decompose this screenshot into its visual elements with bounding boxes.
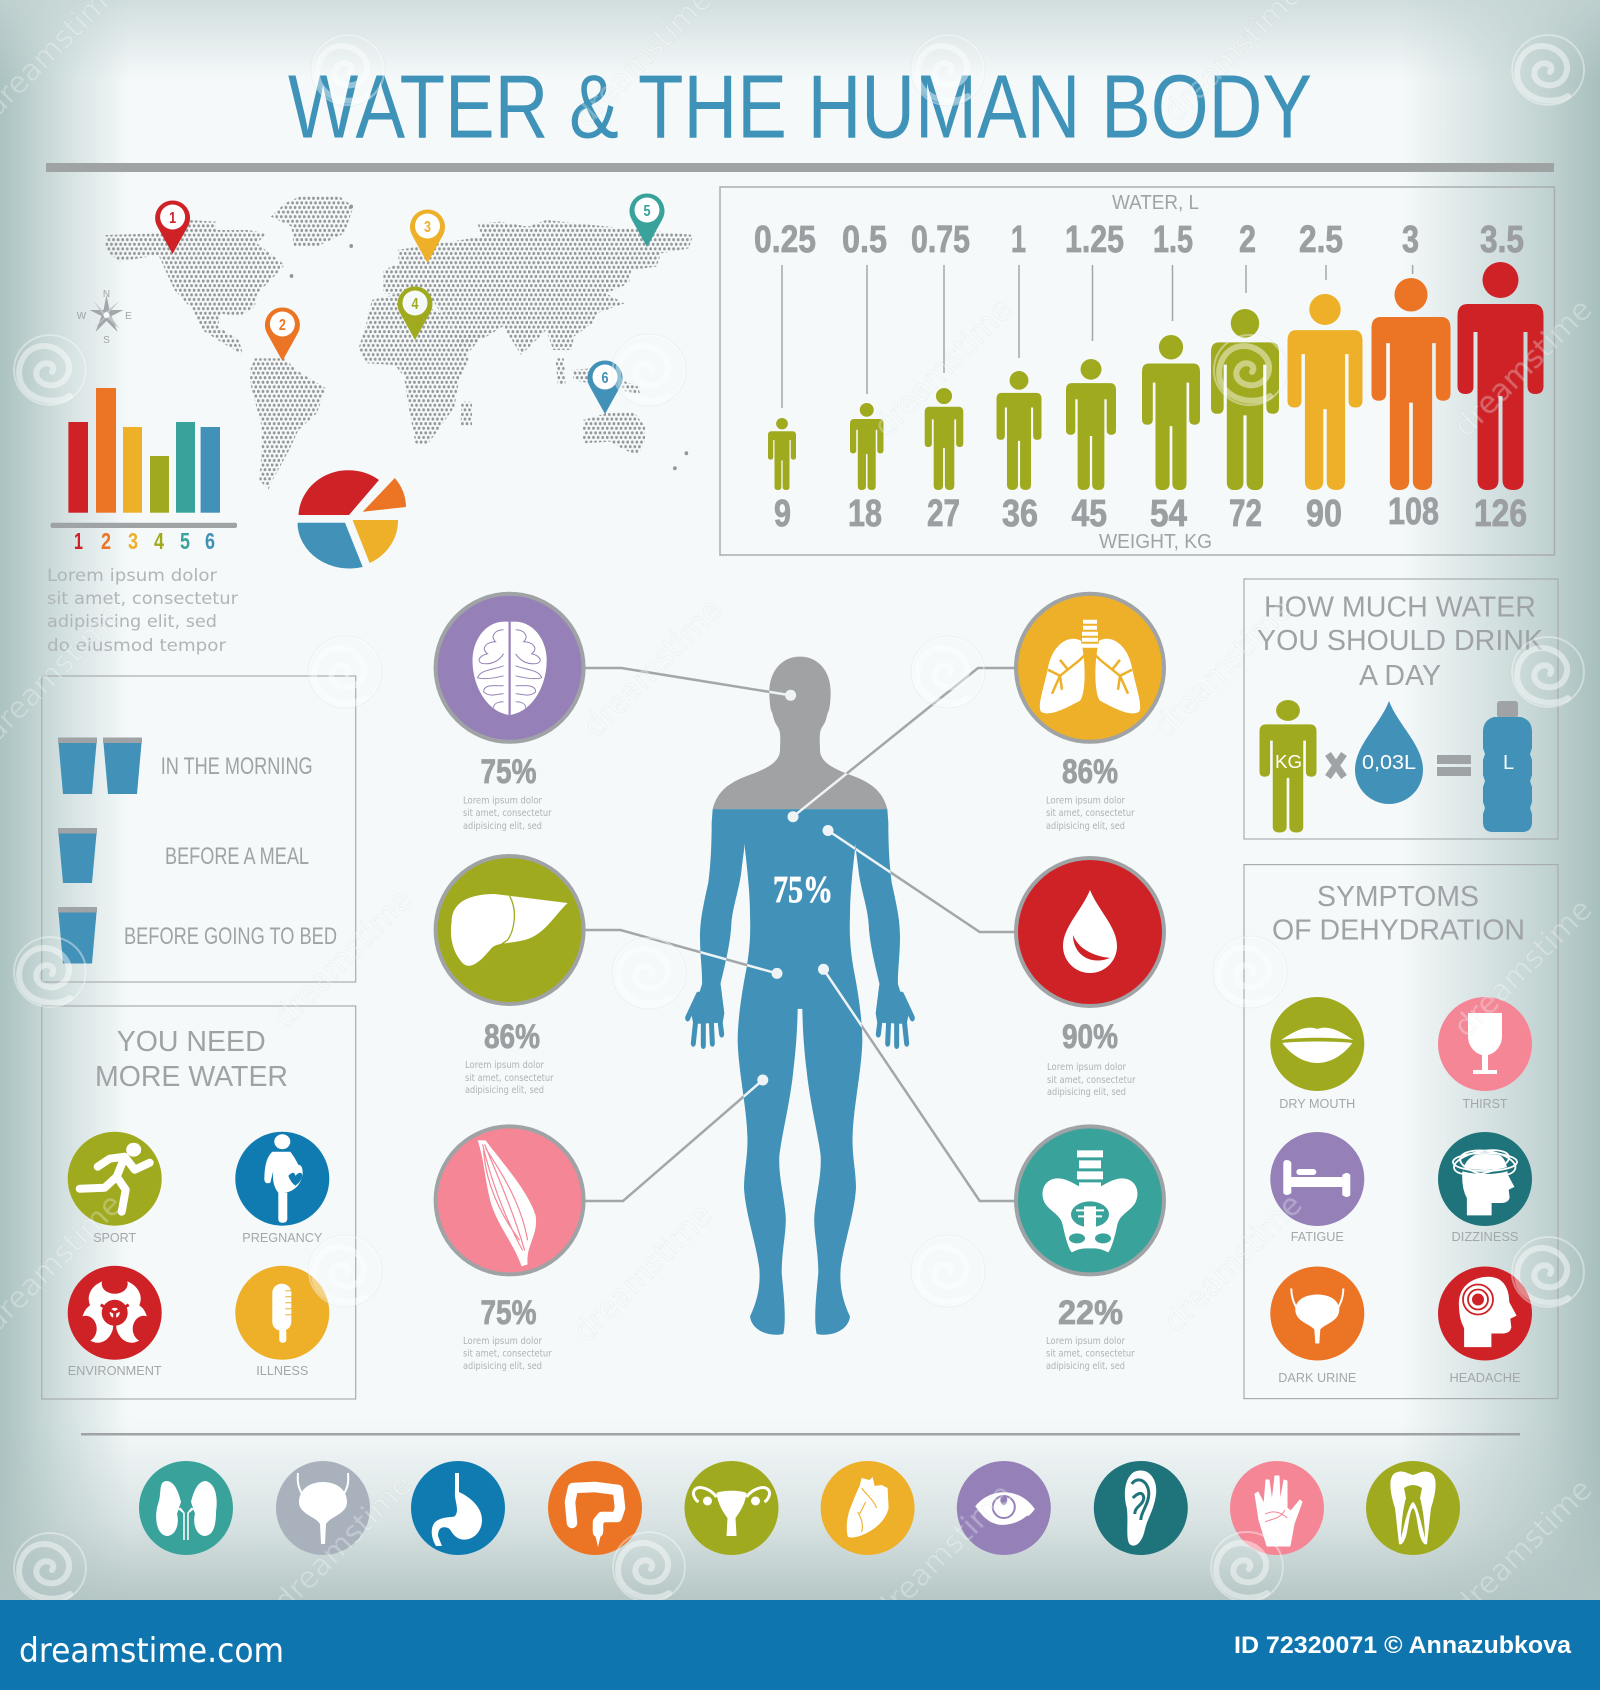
watermark text: dreamstime xyxy=(1157,1187,1309,1339)
panel: water by weight xyxy=(720,187,1554,555)
intro text block: sit amet, consectetur xyxy=(47,589,238,609)
stat: lungs xyxy=(1046,753,1135,832)
white connector segments inside body xyxy=(700,690,891,1098)
icon: pregnancy xyxy=(235,1132,329,1226)
heading: OF DEHYDRATION xyxy=(1272,915,1525,947)
icon: tooth xyxy=(1366,1461,1460,1555)
weight values: 90 xyxy=(1306,493,1342,535)
bar chart: 4 xyxy=(154,528,164,554)
bar chart: 5 xyxy=(180,528,190,554)
label: fatigue: FATIGUE xyxy=(1291,1229,1344,1244)
weight values: 18 xyxy=(848,493,882,535)
watermark text: dreamstime xyxy=(267,1467,419,1619)
stat: blood: 90% xyxy=(1062,1018,1118,1056)
icon row: organs xyxy=(139,1461,1460,1555)
stat: liver: Lorem ipsum dolor xyxy=(465,1060,544,1071)
footer logo text: dreamstime.com xyxy=(19,1631,284,1671)
glass: morning 1 xyxy=(58,738,97,794)
compass rose: N xyxy=(103,289,110,300)
icon: bottle: L xyxy=(1503,752,1514,774)
body blue lower xyxy=(688,657,912,1335)
weight values xyxy=(774,491,1527,535)
label: illness: ILLNESS xyxy=(256,1363,309,1378)
organ: blood xyxy=(1016,858,1164,1006)
stat: lungs: sit amet, consectetur xyxy=(1046,808,1135,819)
footer credit text: ID 72320071 © Annazubkova xyxy=(1234,1632,1572,1659)
stat: muscle xyxy=(463,1294,552,1372)
water values xyxy=(754,219,1524,261)
heading xyxy=(1257,592,1544,692)
water values: 2 xyxy=(1239,219,1256,261)
panel: how much water xyxy=(1244,579,1558,839)
pin 3 xyxy=(410,209,445,263)
watermark text: dreamstime xyxy=(1147,592,1299,744)
stat: brain: Lorem ipsum dolor xyxy=(463,796,542,806)
pin 6: 6 xyxy=(602,370,609,387)
label: meal: BEFORE A MEAL xyxy=(165,843,309,870)
organ: pelvis xyxy=(1016,1126,1164,1274)
heading: A DAY xyxy=(1359,660,1441,692)
icon: uterus xyxy=(684,1461,778,1555)
body percentage: 75% xyxy=(773,869,833,911)
panel: when to drink xyxy=(42,676,356,982)
panel: you need more water xyxy=(42,1006,356,1399)
heading xyxy=(95,1026,288,1093)
water values: 3.5 xyxy=(1480,219,1524,261)
organ: brain xyxy=(436,594,584,742)
stat: blood: sit amet, consectetur xyxy=(1047,1075,1136,1086)
intro text block: do eiusmod tempor xyxy=(47,636,226,656)
weight values: 126 xyxy=(1474,493,1527,535)
icon: bottle xyxy=(1483,701,1532,832)
watermark text: dreamstime xyxy=(577,592,729,744)
icon: dark urine xyxy=(1270,1266,1364,1360)
leader lines xyxy=(782,265,1413,408)
world dot map xyxy=(106,195,693,490)
icon: sport xyxy=(68,1132,162,1226)
water values: 0.75 xyxy=(911,219,970,261)
compass rose: W xyxy=(77,311,87,322)
compass rose: E xyxy=(125,311,132,322)
glass: morning 2 xyxy=(103,738,142,794)
water values: 1.5 xyxy=(1153,219,1193,261)
pie chart xyxy=(298,470,406,569)
stat: liver xyxy=(465,1018,554,1096)
bar chart: 3 xyxy=(128,528,138,554)
water values: 2.5 xyxy=(1299,219,1343,261)
pin 4: 4 xyxy=(412,296,419,313)
body grey upper xyxy=(712,656,888,809)
stat: brain: sit amet, consectetur xyxy=(463,808,552,819)
water values: 1.25 xyxy=(1065,219,1124,261)
multiply sign xyxy=(1328,754,1344,777)
intro text block: adipisicing elit, sed xyxy=(47,612,217,632)
pin 2 xyxy=(265,307,300,361)
label: dry mouth: DRY MOUTH xyxy=(1279,1096,1355,1111)
icon: kidneys xyxy=(139,1461,233,1555)
water values: 0.25 xyxy=(754,219,816,261)
label: bed: BEFORE GOING TO BED xyxy=(124,923,337,950)
pin 4 xyxy=(398,286,432,340)
watermark text: dreamstime xyxy=(267,882,419,1034)
stat: brain xyxy=(463,753,552,832)
bar chart: 6 xyxy=(205,528,215,554)
pin 5 xyxy=(630,193,664,247)
pin 1: 1 xyxy=(169,210,176,227)
pin 5: 5 xyxy=(644,203,651,220)
stat: muscle: sit amet, consectetur xyxy=(463,1348,552,1360)
heading xyxy=(1272,881,1525,947)
pin 1 xyxy=(155,200,190,254)
label: morning: IN THE MORNING xyxy=(161,753,313,780)
panel: symptoms xyxy=(1244,865,1558,1399)
intro text block xyxy=(47,566,238,656)
stat: liver: 86% xyxy=(484,1018,540,1056)
stat: brain: 75% xyxy=(480,753,536,791)
bar chart: 2 xyxy=(101,528,111,554)
icon: drop: 0,03L xyxy=(1362,752,1416,774)
organ: lungs xyxy=(1016,594,1164,742)
icon: intestine xyxy=(548,1461,642,1555)
icon: drop xyxy=(1355,701,1423,804)
person figures xyxy=(768,262,1544,490)
heading: YOU NEED xyxy=(117,1026,266,1058)
equals sign xyxy=(1437,755,1471,776)
stat: pelvis: Lorem ipsum dolor xyxy=(1046,1336,1125,1347)
weight values: 36 xyxy=(1002,493,1038,535)
organ: muscle xyxy=(436,1126,584,1274)
icon: person kg xyxy=(1260,700,1317,832)
stat: pelvis: 22% xyxy=(1058,1294,1123,1332)
stat: muscle: adipisicing elit, sed xyxy=(463,1361,542,1372)
intro text block: Lorem ipsum dolor xyxy=(47,566,217,586)
bar chart xyxy=(50,388,237,554)
weight values: 45 xyxy=(1072,493,1107,535)
compass rose xyxy=(77,289,132,346)
watermark text: dreamstime xyxy=(1447,1472,1599,1624)
map pins xyxy=(155,193,664,414)
stat: lungs: Lorem ipsum dolor xyxy=(1046,796,1125,806)
label: sport: SPORT xyxy=(93,1230,136,1245)
icon: heart xyxy=(821,1461,915,1555)
heading: YOU SHOULD DRINK xyxy=(1257,625,1544,657)
label: environment: ENVIRONMENT xyxy=(68,1363,162,1378)
icon: eye xyxy=(957,1461,1051,1555)
heading: MORE WATER xyxy=(95,1061,288,1093)
heading: HOW MUCH WATER xyxy=(1264,592,1536,624)
glass: bed xyxy=(58,907,97,964)
connector dots xyxy=(757,690,834,1086)
weight values: 108 xyxy=(1388,491,1439,533)
bar chart: 1 xyxy=(74,528,83,554)
icon: dry mouth xyxy=(1270,997,1364,1091)
label: pregnancy: PREGNANCY xyxy=(242,1230,323,1245)
stat: muscle: Lorem ipsum dolor xyxy=(463,1336,542,1347)
label: headache: HEADACHE xyxy=(1450,1370,1521,1385)
stat: liver: adipisicing elit, sed xyxy=(465,1085,544,1096)
water values: 1 xyxy=(1011,219,1026,261)
pin 6 xyxy=(588,360,622,414)
label: dizziness: DIZZINESS xyxy=(1452,1229,1519,1244)
icon: dizziness xyxy=(1438,1132,1532,1226)
stat: liver: sit amet, consectetur xyxy=(465,1073,554,1084)
stat: pelvis: adipisicing elit, sed xyxy=(1046,1361,1125,1372)
icon: environment xyxy=(68,1266,162,1360)
icon: illness xyxy=(235,1266,329,1360)
watermark text: dreamstime xyxy=(1447,292,1599,444)
connector lines xyxy=(585,668,1016,1201)
icon: hand xyxy=(1230,1461,1324,1555)
axis label: water: WATER, L xyxy=(1112,192,1199,214)
label: dark urine: DARK URINE xyxy=(1278,1370,1357,1385)
stat: blood xyxy=(1047,1018,1136,1098)
stat: muscle: 75% xyxy=(480,1294,536,1332)
weight values: 54 xyxy=(1150,493,1187,535)
icon: thirst xyxy=(1438,997,1532,1091)
watermark text: dreamstime xyxy=(867,1477,1019,1629)
human body figure xyxy=(685,656,915,1335)
bottom rule xyxy=(81,1433,1520,1436)
pin 2: 2 xyxy=(279,317,286,334)
axis label: weight: WEIGHT, KG xyxy=(1099,531,1212,553)
icon: fatigue xyxy=(1270,1132,1364,1226)
label: thirst: THIRST xyxy=(1462,1096,1508,1111)
stat: brain: adipisicing elit, sed xyxy=(463,821,542,832)
organ: liver xyxy=(436,856,584,1004)
water values: 0.5 xyxy=(842,219,887,261)
weight values: 27 xyxy=(927,493,960,535)
weight values: 72 xyxy=(1229,493,1262,535)
stat: pelvis: sit amet, consectetur xyxy=(1046,1348,1135,1360)
water values: 3 xyxy=(1402,219,1419,261)
watermark text: dreamstime xyxy=(1447,892,1599,1044)
glass: meal xyxy=(58,828,97,883)
icon: bladder xyxy=(276,1461,370,1555)
stat: lungs: 86% xyxy=(1062,753,1118,791)
heading: SYMPTOMS xyxy=(1317,881,1479,913)
icon: stomach xyxy=(411,1461,505,1555)
stat: pelvis xyxy=(1046,1294,1135,1372)
icon: ear xyxy=(1094,1461,1188,1555)
footer bar xyxy=(0,1600,1600,1690)
icon: headache xyxy=(1438,1266,1532,1360)
watermark text: dreamstime xyxy=(567,1197,719,1349)
watermark text: dreamstime xyxy=(867,292,1019,444)
compass rose: S xyxy=(103,335,110,346)
pin 3: 3 xyxy=(424,219,431,236)
stat: lungs: adipisicing elit, sed xyxy=(1046,821,1125,832)
stat: blood: adipisicing elit, sed xyxy=(1047,1087,1126,1098)
icon: person kg: KG xyxy=(1275,752,1302,772)
title rule xyxy=(46,163,1554,172)
weight values: 9 xyxy=(774,493,791,535)
stat: blood: Lorem ipsum dolor xyxy=(1047,1062,1126,1073)
title: WATER & THE HUMAN BODY xyxy=(288,58,1312,158)
